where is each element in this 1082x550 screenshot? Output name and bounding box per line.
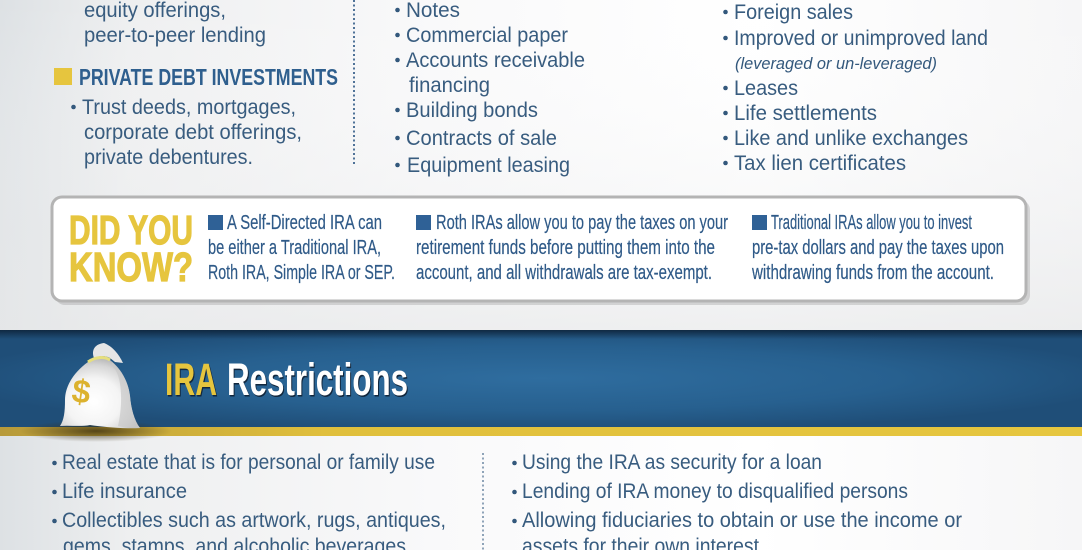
panel: middle investments list: Commercial paper [406,24,568,47]
callout: did you know [52,197,1030,305]
panel: right investments list [723,1,988,175]
panel: middle investments list: Equipment leasing [407,154,570,177]
heading: IRA Restrictions: IRA [166,356,218,406]
callout: did you know: be either a Traditional IRA, [208,237,381,259]
banner: IRA Restrictions [0,330,1082,442]
panel: middle investments list: Building bonds [406,99,538,122]
panel: middle investments list: Accounts receivable [406,49,585,72]
panel: left investments column: peer-to-peer lending [84,24,266,47]
callout: did you know: Roth IRAs allow you to pay the taxes on your [436,212,728,234]
icon: money bag: $ [70,372,93,411]
panel: right investments list: (leveraged or un-leveraged) [735,54,937,73]
callout: did you know: withdrawing funds from the account. [751,262,994,284]
heading: IRA Restrictions: Restrictions [227,354,408,405]
panel: restrictions right list: Using the IRA as security for a loan [522,451,822,474]
panel: left investments column: Trust deeds, mortgages, [82,96,296,119]
panel: left investments column [54,0,338,169]
panel: left investments column: corporate debt offerings, [84,121,302,144]
panel: restrictions right list [512,451,962,550]
panel: middle investments list: Contracts of sale [406,127,557,150]
panel: restrictions left list: Life insurance [62,480,187,503]
callout: did you know: Roth IRA, Simple IRA or SEP. [208,262,395,284]
heading: IRA Restrictions [165,354,409,406]
callout: did you know: A Self-Directed IRA can [227,212,382,234]
panel: middle investments list [395,0,585,177]
panel: left investments column: PRIVATE DEBT INVESTMENTS [79,64,338,90]
panel: right investments list: Life settlements [734,102,877,125]
callout: did you know: DID YOU [69,207,193,253]
panel: right investments list: Like and unlike exchanges [734,127,968,150]
panel: restrictions right list: Allowing fiduciaries to obtain or use the income or [522,509,962,532]
heading: IRA Restrictions: Restrictions [228,356,409,406]
callout: did you know: Traditional IRAs allow you to invest [771,212,972,234]
panel: right investments list: Foreign sales [734,1,853,24]
panel: restrictions right list: Lending of IRA money to disqualified persons [522,480,908,503]
heading: IRA Restrictions: IRA [165,354,217,405]
callout: did you know: account, and all withdrawals are tax-exempt. [416,262,712,284]
panel: restrictions left list [52,451,446,550]
panel: left investments column: private debentures. [84,146,253,169]
panel: restrictions left list: Collectibles such as artwork, rugs, antiques, [62,509,446,532]
panel: right investments list: Improved or unimproved land [734,27,988,50]
panel: right investments list: Tax lien certificates [734,152,906,175]
panel: restrictions left list: Real estate that is for personal or family use [62,451,435,474]
callout: did you know: retirement funds before putting them into the [416,237,715,259]
icon: money bag [60,343,140,428]
panel: middle investments list: financing [409,74,490,97]
panel: right investments list: Leases [734,77,798,100]
callout: did you know: KNOW? [69,244,193,290]
